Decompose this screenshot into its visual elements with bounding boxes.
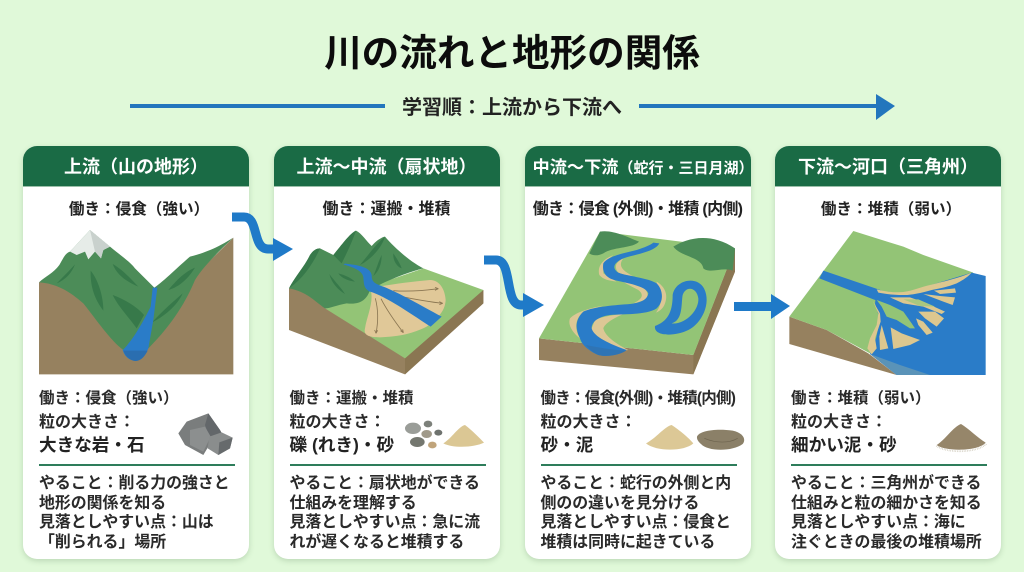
grain size label: 粒の大きさ： (290, 414, 386, 431)
to-do text: 仕組みを理解する (290, 495, 417, 512)
arrow: meander to delta (734, 294, 790, 319)
grain size label: 粒の大きさ： (791, 414, 887, 431)
panel heading: 下流〜河口（三角州） (798, 157, 978, 177)
illustration: delta (789, 231, 986, 375)
work label: 働き：運搬・堆積 (322, 201, 450, 218)
to-do text (290, 474, 480, 551)
to-do text: やること：削る力の強さと (39, 475, 230, 492)
icon: rocks (178, 413, 233, 455)
divider (39, 464, 235, 466)
to-do text: やること：三角州ができる (791, 475, 981, 492)
to-do text: やること：蛇行の外側と内 (540, 475, 731, 492)
title: 川の流れと地形の関係 (324, 32, 700, 74)
icon: sand and mud piles (646, 425, 744, 450)
to-do text: 仕組みと粒の細かさを知る (791, 495, 982, 512)
panel heading (274, 146, 500, 187)
work label: 働き：侵食 (外側)・堆積 (内側) (533, 201, 742, 218)
to-do text: 見落としやすい点：急に流 (290, 514, 480, 531)
work summary: 働き：堆積（弱い） (791, 390, 931, 407)
to-do text: 注ぐときの最後の堆積場所 (791, 534, 982, 551)
grain size value: 大きな岩・石 (39, 435, 145, 455)
grain size label: 粒の大きさ： (540, 414, 637, 431)
to-do text: れが遅くなると堆積する (290, 534, 464, 551)
illustration: mountain valley (39, 230, 234, 374)
grain size value: 細かい泥・砂 (791, 435, 897, 455)
panel: midstream to downstream (524, 146, 750, 559)
to-do text: 側のの違いを見分ける (540, 495, 699, 512)
work label: 働き：堆積（弱い） (821, 201, 961, 218)
panel heading: 上流（山の地形） (64, 157, 208, 177)
work summary: 働き：侵食(外側)・堆積(内側) (540, 390, 735, 407)
to-do text: 見落としやすい点：海に (791, 514, 966, 531)
illustration: meander (539, 231, 735, 374)
grain size value: 砂・泥 (540, 435, 593, 455)
panel: upstream (23, 146, 249, 559)
to-do text (39, 474, 230, 551)
to-do text: 見落としやすい点：山は (39, 514, 214, 531)
grain size value: 礫 (れき)・砂 (290, 435, 394, 455)
divider (290, 464, 486, 466)
illustration: alluvial fan (289, 230, 484, 374)
icon: gravel and sand (405, 420, 484, 448)
arrow: upstream to fan (232, 212, 293, 261)
to-do text: 地形の関係を知る (39, 495, 166, 512)
to-do text (540, 474, 731, 551)
to-do text: 堆積は同時に起きている (540, 534, 715, 551)
panel heading (775, 146, 1001, 187)
icon: fine mud pile (936, 424, 987, 452)
panel: downstream to river mouth (775, 146, 1001, 559)
panel heading (524, 146, 750, 187)
to-do text: やること：扇状地ができる (290, 475, 480, 492)
work label: 働き：侵食（強い） (69, 201, 209, 218)
to-do text: 「削られる」場所 (39, 534, 166, 551)
learning order arrow line left (130, 104, 385, 108)
learning order label: 学習順：上流から下流へ (402, 97, 622, 119)
panel heading: 上流〜中流（扇状地） (296, 157, 476, 177)
panel heading: 中流〜下流（蛇行・三日月湖） (532, 157, 753, 177)
to-do text: 見落としやすい点：侵食と (540, 514, 731, 531)
grain size label: 粒の大きさ： (39, 414, 135, 431)
learning order arrow right (639, 94, 895, 120)
arrow: fan to meander (484, 256, 544, 317)
work summary: 働き：運搬・堆積 (290, 390, 414, 407)
divider (540, 464, 736, 466)
work summary: 働き：侵食（強い） (39, 390, 179, 407)
panel heading (23, 146, 249, 187)
divider (791, 464, 987, 466)
to-do text (791, 474, 982, 551)
panel: upstream to midstream (274, 146, 500, 559)
